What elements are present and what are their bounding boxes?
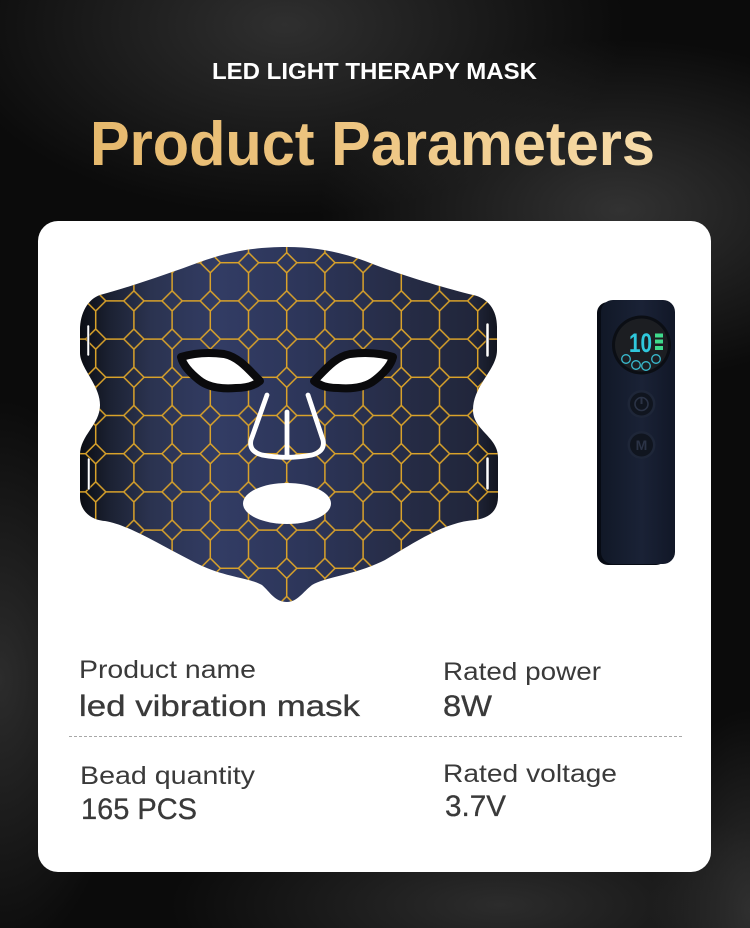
parameter: product name: led vibration mask — [79, 690, 361, 723]
parameter: rated power — [443, 658, 601, 723]
controller display — [612, 316, 671, 374]
parameter: rated power: 8W — [443, 690, 493, 723]
title: Product Parameters — [90, 110, 655, 179]
parameter: bead quantity: 165 PCS — [81, 793, 197, 826]
controller display: 10 — [629, 328, 652, 358]
parameter: rated voltage: Rated voltage — [443, 760, 617, 788]
parameter: rated power: Rated power — [443, 658, 601, 686]
mode button — [628, 431, 656, 459]
left eye opening — [181, 353, 260, 388]
parameter: rated voltage — [443, 760, 617, 823]
parameter: bead quantity — [80, 762, 256, 826]
parameter: product name: Product name — [79, 656, 256, 684]
icon: LED face mask — [75, 245, 503, 605]
nose opening — [251, 395, 323, 457]
subtitle: LED LIGHT THERAPY MASK — [212, 58, 537, 84]
icon: remote controller — [597, 300, 675, 565]
panel: product card — [38, 221, 711, 872]
mouth opening — [243, 483, 331, 524]
parameter: rated voltage: 3.7V — [445, 790, 506, 823]
right eye opening — [314, 353, 393, 388]
power button — [628, 390, 656, 418]
mode button: M — [636, 437, 647, 453]
side strap slits — [87, 323, 489, 490]
parameter: product name — [79, 656, 361, 723]
parameter: bead quantity: Bead quantity — [80, 762, 256, 790]
